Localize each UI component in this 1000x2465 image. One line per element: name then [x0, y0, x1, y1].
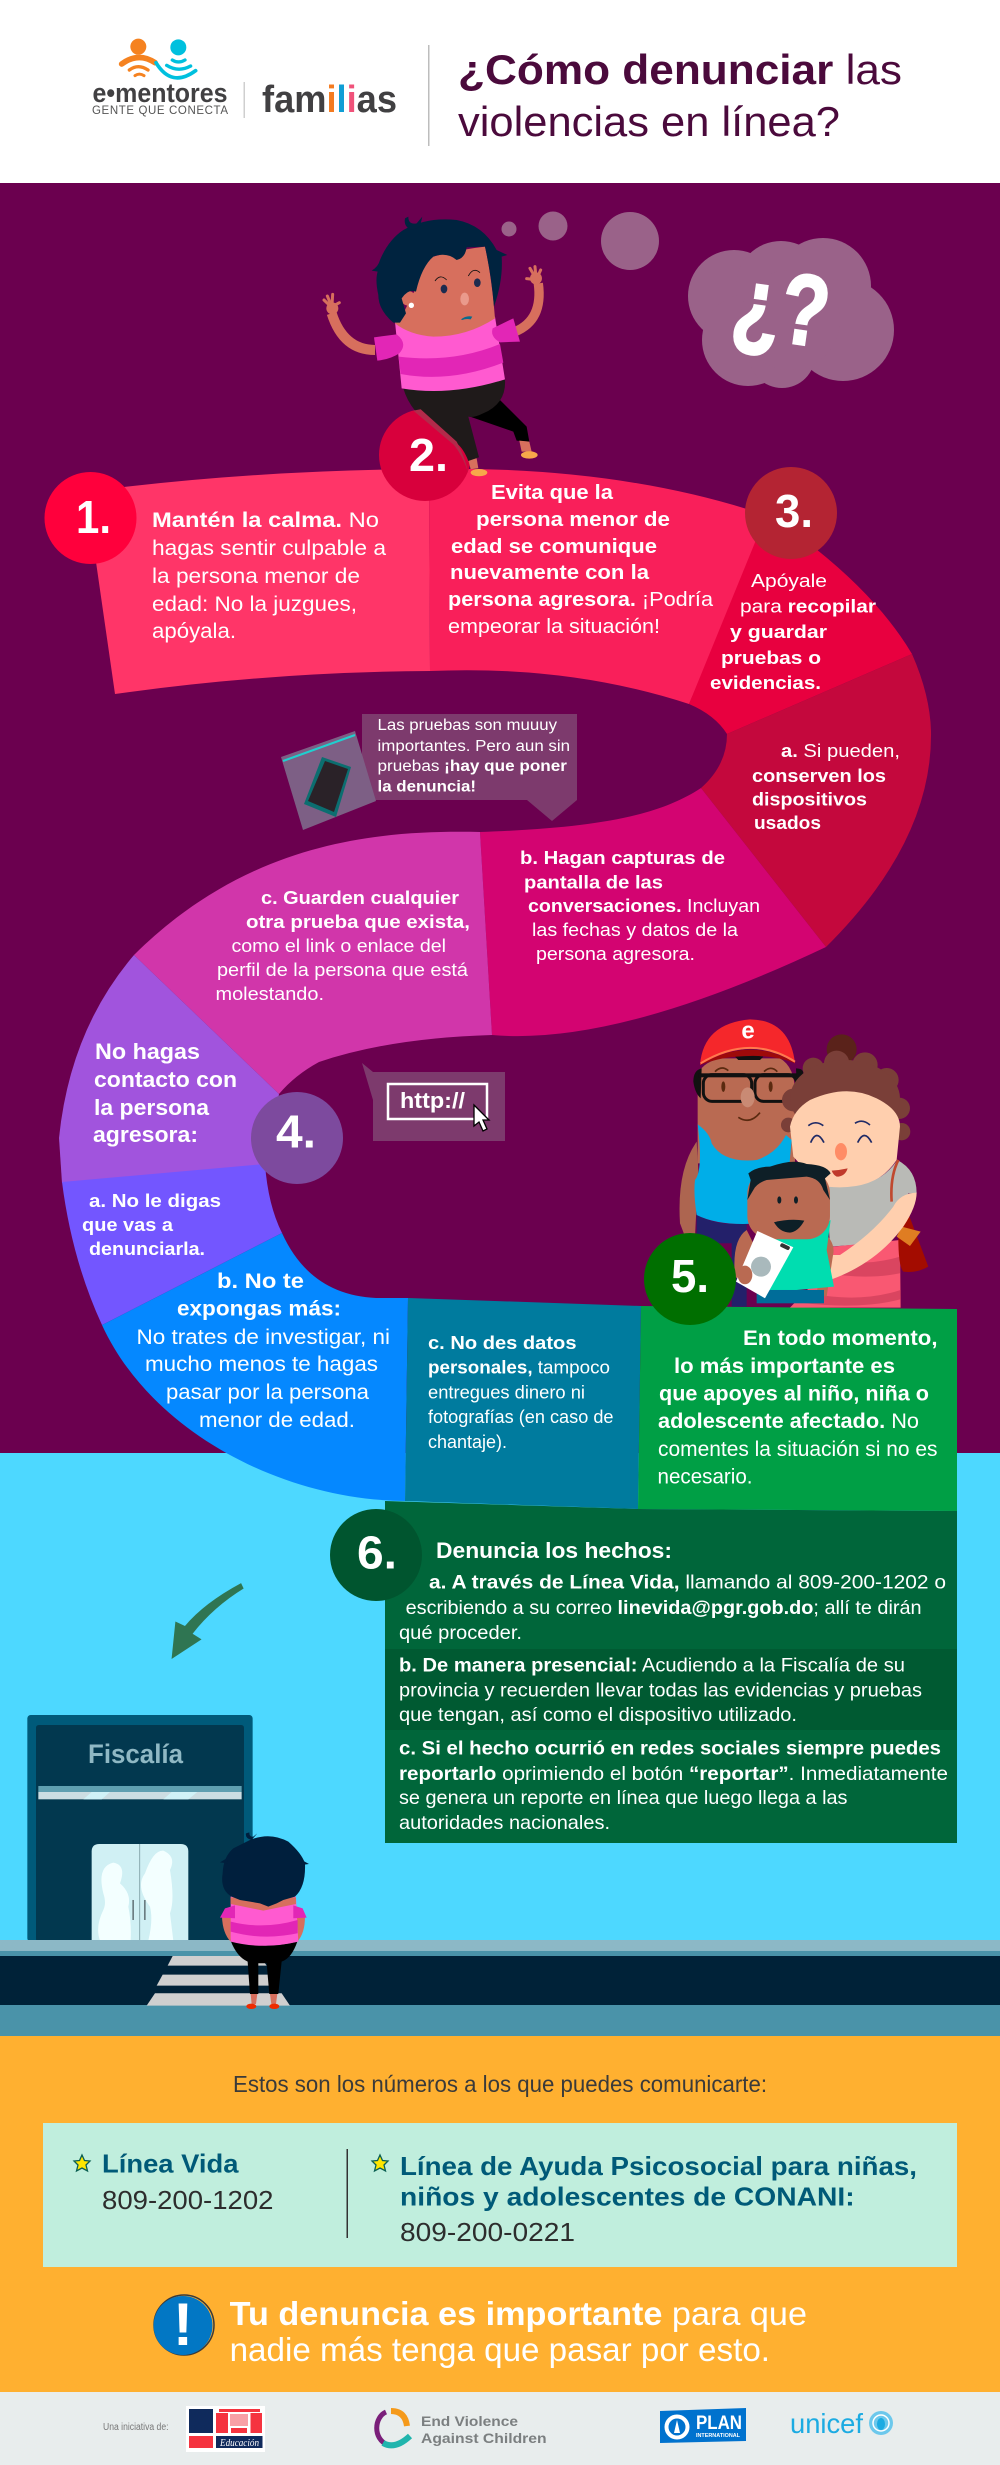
text: step 2: nuevamente con la [450, 561, 650, 584]
illustration: family: e [741, 1018, 755, 1045]
illustration: Fiscalía building [27, 1715, 253, 1942]
badge: 5 [644, 1233, 736, 1325]
badge: 5: 5. [671, 1250, 709, 1302]
text: step 3: evidencias. [710, 672, 821, 693]
badge: 4 [251, 1092, 343, 1184]
character: person from behind [220, 1832, 309, 2009]
text: step 4a: a. No le digas [89, 1191, 221, 1211]
text: closing message [230, 2295, 807, 2368]
segment: step 1 [90, 469, 430, 694]
text: step 3a: a. Si pueden, [781, 741, 900, 761]
text: step 4a: denunciarla. [89, 1239, 205, 1259]
title: violencias en línea? [458, 98, 840, 145]
text: step 2: persona menor de [476, 508, 670, 531]
callout: evidence note: pruebas ¡hay que poner [378, 758, 567, 775]
text: step 5: adolescente afectado. No [658, 1410, 919, 1433]
text: step 5: lo más importante es [674, 1355, 895, 1378]
text: step 6b: b. De manera presencial: Acudiendo a la Fiscalía de su [399, 1655, 905, 1677]
text: step 5: comentes la situación si no es [658, 1438, 938, 1461]
text: step 4b: expongas más: [177, 1298, 341, 1320]
title: ¿Cómo denunciar las [458, 46, 902, 93]
text: step 6a: escribiendo a su correo linevida@pgr.gob.do; allí te dirán [406, 1597, 922, 1619]
text: step 6c: reportarlo oprimiendo el botón “reportar” . Inmediatamente [399, 1763, 948, 1785]
text: step 3c: otra prueba que exista, [246, 912, 470, 932]
badge: 6: 6. [357, 1527, 397, 1579]
text: step 3b: pantalla de las [524, 872, 663, 892]
helpline: CONANI: Línea de Ayuda Psicosocial para niñas, [400, 2151, 917, 2181]
text: step 3b [520, 848, 760, 964]
helpline: CONANI: niños y adolescentes de CONANI: [400, 2182, 855, 2212]
text: step 4: No hagas [95, 1039, 200, 1064]
segment: step 3 [689, 507, 912, 734]
icon: cursor [474, 1105, 489, 1131]
segment: step 4a [62, 1164, 282, 1325]
badge: 1: 1. [76, 491, 111, 543]
text: step 2: empeorar la situación! [448, 615, 660, 638]
segment: step 4c [405, 1298, 641, 1509]
logo: End Violence [377, 2411, 547, 2446]
helpline: Línea Vida: 809-200-1202 [102, 2185, 274, 2215]
text: step 4b [136, 1270, 390, 1432]
text: step 6a [399, 1572, 946, 1644]
badge: 6 [330, 1509, 422, 1601]
badge: 1 [44, 472, 136, 564]
text: step 2: persona agresora. ¡Podría [448, 588, 714, 611]
badge: 4: 4. [276, 1106, 316, 1158]
badge: 2 [379, 409, 471, 501]
text: step 6b: provincia y recuerden llevar todas las evidencias y pruebas [399, 1680, 922, 1702]
text: step 3 [710, 570, 876, 693]
helpline: CONANI: 809-200-0221 [400, 2217, 575, 2247]
text: step 4b: pasar por la persona [166, 1381, 369, 1404]
logo: unicef: unicef [790, 2408, 863, 2439]
text: step 4c: personales, tampoco [428, 1358, 610, 1378]
text: step 4: la persona [94, 1095, 210, 1120]
text: step 3c: c. Guarden cualquier [261, 888, 459, 908]
text: step 4b: No trates de investigar, ni [136, 1326, 390, 1349]
text: step 5: En todo momento, [743, 1327, 938, 1350]
arrow [172, 1583, 244, 1659]
text: step 4b: b. No te [217, 1270, 304, 1293]
logo: Plan International: INTERNATIONAL [696, 2433, 740, 2439]
text: closing message: Tu denuncia es importante para que [230, 2295, 807, 2332]
text: step 3a: usados [754, 813, 821, 833]
icon: tablet in evidence bag [281, 731, 376, 830]
segment: step 3b [480, 788, 826, 1036]
icon: exclamation [154, 2291, 214, 2358]
text: step 6a: a. A través de Línea Vida, llamando al 809-200-1202 o [429, 1572, 946, 1594]
logo: ministry of education [186, 2406, 265, 2452]
text: step 4c: chantaje). [428, 1432, 507, 1452]
text: step 3b: las fechas y datos de la [532, 920, 739, 940]
badge: 3: 3. [775, 485, 813, 537]
text: step 4c [428, 1333, 614, 1452]
text: step 4b: mucho menos te hagas [145, 1353, 378, 1376]
logo: ministry of education: Educación [219, 2438, 259, 2449]
segment: step 4 [59, 955, 279, 1183]
thought cloud with question marks: ¿? [727, 245, 836, 369]
panel: winding path [59, 469, 957, 1843]
segment: step 2 [429, 469, 760, 704]
text: step 4c: fotografías (en caso de [428, 1407, 614, 1427]
text: step 2: edad se comunique [451, 535, 657, 558]
logo: End Violence: End Violence [421, 2413, 518, 2429]
callout: evidence note: Las pruebas son muuuy [378, 717, 557, 734]
logo: e-mentores [92, 39, 228, 117]
text: step 3b: b. Hagan capturas de [520, 848, 725, 868]
text: step 6a: qué proceder. [399, 1622, 522, 1644]
text: closing message: nadie más tenga que pasar por esto. [230, 2331, 770, 2368]
text: step 6c: autoridades nacionales. [399, 1812, 610, 1834]
thought cloud with question marks [502, 212, 894, 388]
callout: evidence note: la denuncia! [378, 778, 476, 796]
icon: star [372, 2155, 388, 2171]
logo: e-mentores: e•mentores [92, 78, 228, 108]
text: step 2: Evita que la [491, 481, 614, 504]
logo: e-mentores: GENTE QUE CONECTA [92, 105, 228, 117]
text: step 1: Mantén la calma. No [152, 508, 379, 532]
segment: step 5 [638, 1306, 957, 1511]
text: step 1 [152, 508, 386, 643]
callout: evidence note: importantes. Pero aun sin [378, 738, 570, 755]
callout: evidence note [362, 714, 577, 821]
text: step 3: y guardar [730, 621, 827, 642]
logo: familias: familias [262, 79, 397, 121]
helpline: Línea Vida: Línea Vida [102, 2149, 239, 2179]
text: step 3b: conversaciones. Incluyan [528, 896, 760, 916]
text: step 3a: dispositivos [752, 790, 867, 810]
text: numbers intro: Estos son los números a los que puedes comunicarte: [233, 2071, 767, 2097]
text: step 4b: menor de edad. [199, 1409, 355, 1432]
footer logos [103, 2406, 893, 2452]
text: step 1: hagas sentir culpable a [152, 536, 386, 560]
text: step 1: edad: No la juzgues, [152, 592, 357, 616]
panel: helplines [43, 2123, 957, 2267]
text: step 1: la persona menor de [152, 564, 360, 588]
text: step 4: contacto con [94, 1067, 237, 1092]
text: step 5: que apoyes al niño, niña o [659, 1383, 929, 1406]
text: step 4c: entregues dinero ni [428, 1382, 585, 1402]
text: step 6b [399, 1655, 922, 1726]
text: step 1: apóyala. [152, 619, 236, 643]
logo: End Violence: Against Children [421, 2430, 547, 2446]
text: step 3: para recopilar [740, 596, 876, 616]
segment: step 4b [102, 1233, 408, 1501]
text: step 6 heading: Denuncia los hechos: [436, 1538, 672, 1563]
text: step 3c [216, 888, 470, 1004]
illustration: family [680, 1018, 928, 1308]
text: step 5: necesario. [658, 1466, 752, 1489]
text: step 4 [93, 1039, 237, 1147]
text: step 2 [448, 481, 714, 638]
badge: 2: 2. [409, 429, 448, 481]
character: worried person [324, 217, 542, 476]
text: step 4a [82, 1191, 221, 1259]
helpline: Línea Vida [102, 2149, 274, 2215]
segment: step 6 [385, 1501, 957, 1843]
text: step 6c [399, 1738, 948, 1834]
text: step 6c: se genera un reporte en línea que luego llega a las [399, 1787, 848, 1809]
logo: Plan International: PLAN [696, 2413, 742, 2434]
text: initiative label: Una iniciativa de: [103, 2422, 168, 2433]
text: step 3: pruebas o [721, 647, 821, 668]
logo: Plan International [660, 2408, 746, 2443]
sign: Fiscalía: Fiscalía [88, 1739, 184, 1769]
text: step 4c: c. No des datos [428, 1333, 576, 1353]
text: step 6b: que tengan, así como el dispositivo utilizado. [399, 1704, 797, 1726]
icon: star [74, 2155, 90, 2171]
text: step 3: Apóyale [751, 570, 827, 591]
street [0, 1940, 1000, 2036]
text: step 3a [752, 741, 900, 833]
helpline: CONANI [400, 2151, 917, 2247]
text: step 6c: c. Si el hecho ocurrió en redes sociales siempre puedes [399, 1738, 941, 1760]
text: step 5 [658, 1327, 938, 1489]
segment: step 3c [134, 832, 492, 1094]
segment: step 3a [701, 654, 931, 947]
title [458, 46, 902, 145]
text: step 4a: que vas a [82, 1215, 174, 1235]
text: step 3c: como el link o enlace del [232, 936, 446, 956]
text: step 3c: perfil de la persona que está [217, 960, 469, 980]
text: step 4: agresora: [93, 1122, 198, 1147]
text: step 3b: persona agresora. [536, 944, 695, 964]
icon: exclamation: ! [173, 2291, 193, 2358]
callout: http link [362, 1063, 505, 1141]
callout: http link: http:// [400, 1088, 465, 1113]
text: step 3c: molestando. [216, 984, 324, 1004]
badge: 3 [745, 467, 837, 559]
text: step 3a: conserven los [752, 766, 886, 786]
